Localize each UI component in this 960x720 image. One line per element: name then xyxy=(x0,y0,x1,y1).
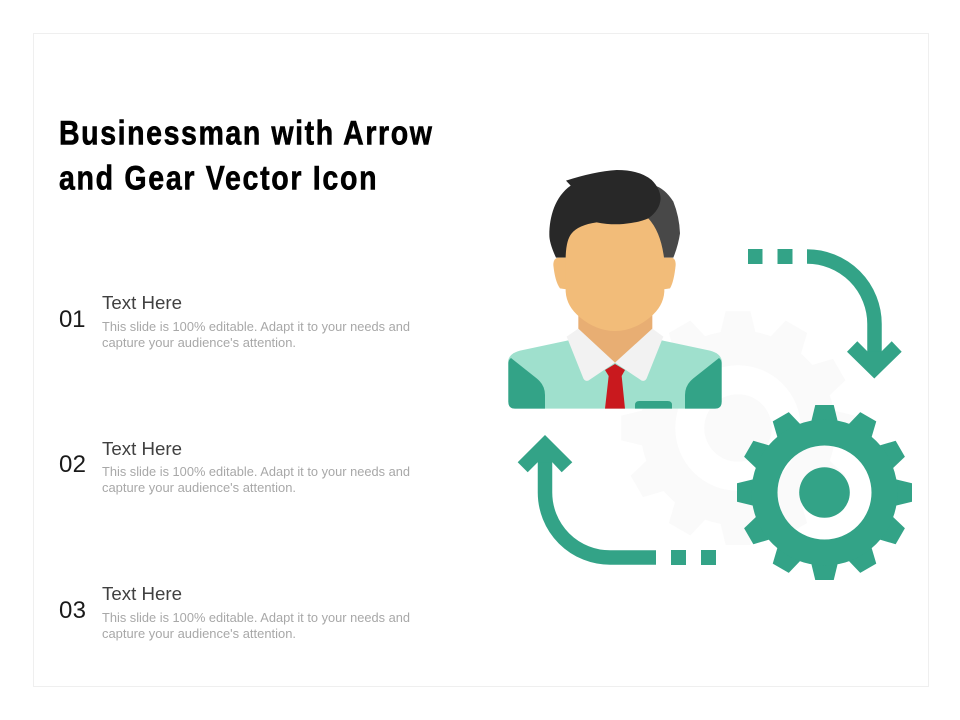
list item 01: 01 xyxy=(59,306,86,333)
face xyxy=(566,218,664,331)
hair back xyxy=(647,185,680,258)
collar right xyxy=(615,329,663,381)
tie xyxy=(605,364,625,409)
list item 01: capture your audience's attention. xyxy=(102,336,296,350)
list item 03 xyxy=(59,583,410,641)
list item 03: This slide is 100% editable. Adapt it to your needs and xyxy=(102,611,410,625)
icon: businessman xyxy=(508,170,722,409)
list item 01: Text Here xyxy=(102,292,182,313)
icon: gear xyxy=(737,405,912,580)
collar left xyxy=(567,329,615,381)
pocket xyxy=(635,401,672,409)
neck xyxy=(578,310,652,363)
list item 03: 03 xyxy=(59,597,86,624)
list item 01 xyxy=(59,292,410,350)
list item 02 xyxy=(59,438,410,495)
list item 01: This slide is 100% editable. Adapt it to your needs and xyxy=(102,320,410,334)
list item 02: Text Here xyxy=(102,438,182,459)
arrow: bottom, pointing up to person xyxy=(518,435,716,565)
list item 02: capture your audience's attention. xyxy=(102,481,296,495)
ears xyxy=(553,258,567,289)
list item 02: 02 xyxy=(59,451,86,478)
icon: faint background gear xyxy=(621,311,855,545)
list item 03: capture your audience's attention. xyxy=(102,627,296,641)
hair front xyxy=(549,170,661,258)
title: and Gear Vector Icon xyxy=(59,159,377,197)
left sleeve xyxy=(508,358,545,409)
shirt xyxy=(508,340,722,409)
right sleeve xyxy=(685,358,722,409)
title xyxy=(59,114,433,197)
arrow: top, pointing down to gear xyxy=(748,249,902,378)
title: Businessman with Arrow xyxy=(59,114,433,152)
list item 02: This slide is 100% editable. Adapt it to your needs and xyxy=(102,465,410,479)
list item 03: Text Here xyxy=(102,583,182,604)
